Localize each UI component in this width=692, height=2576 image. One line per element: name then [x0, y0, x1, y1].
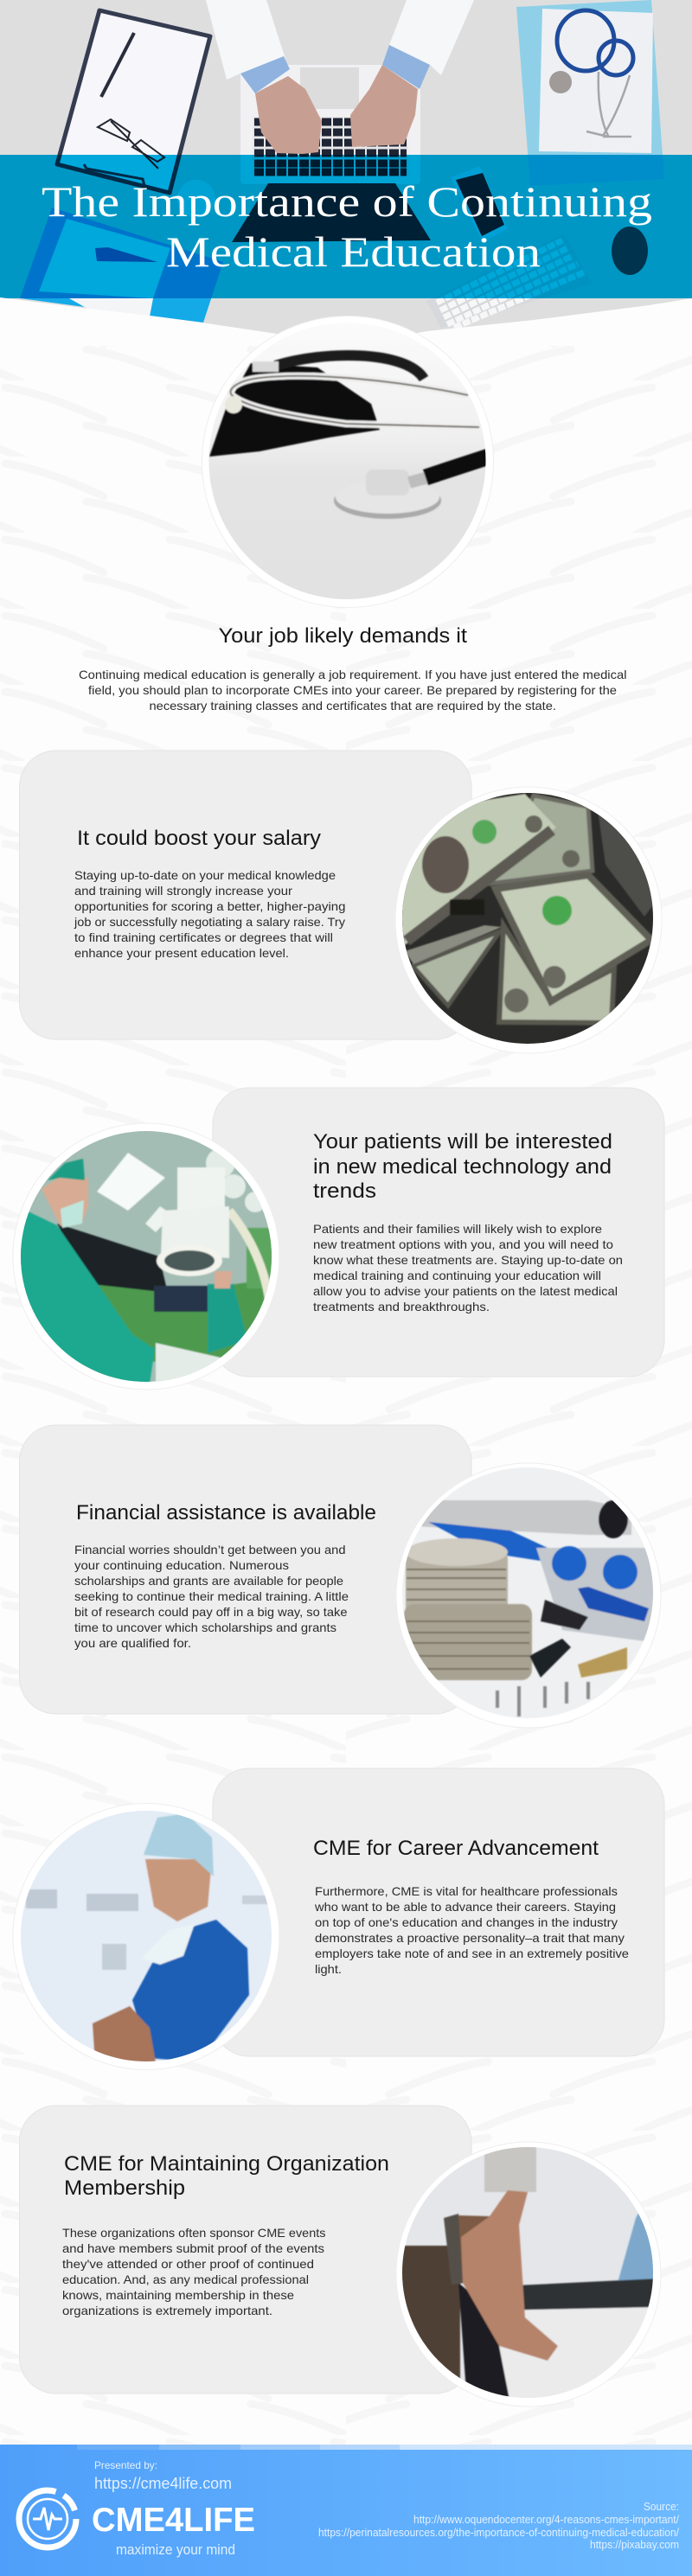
body text: new treatment options with you, and you will need to — [313, 1237, 613, 1251]
section 1: your job likely demands it — [79, 316, 626, 713]
section 5: CME for career advancement — [13, 1768, 664, 2070]
body text — [62, 2226, 325, 2317]
body text: knows, maintaining membership in these — [62, 2288, 294, 2302]
heading: CME for Career Advancement — [313, 1837, 599, 1860]
body text: know what these treatments are. Staying up-to-date on — [313, 1253, 623, 1267]
heading: Financial assistance is available — [76, 1501, 376, 1525]
footer — [0, 2445, 692, 2576]
panel — [19, 2106, 471, 2394]
panel — [213, 1088, 664, 1377]
heading — [64, 2152, 389, 2200]
photo: coins and pens — [396, 1463, 661, 1728]
heading: Membership — [64, 2176, 185, 2200]
body text: education. And, as any medical professional — [62, 2272, 309, 2286]
body text: allow you to advise your patients on the latest medical — [313, 1284, 618, 1298]
tagline: maximize your mind — [116, 2541, 235, 2558]
body text — [314, 1884, 629, 1976]
sources: https://pixabay.com — [590, 2538, 679, 2551]
heading: CME for Maintaining Organization — [64, 2152, 389, 2176]
heading: Your patients will be interested — [313, 1130, 612, 1154]
header photo: doctor's desk — [0, 0, 692, 337]
body text: job or successfully negotiating a salary raise. Try — [74, 915, 345, 929]
photo: dollar bills — [389, 787, 662, 1053]
title: Medical Education — [166, 227, 541, 276]
body text: scholarships and grants are available for people — [74, 1574, 343, 1588]
sources — [318, 2500, 679, 2551]
photo detail: clipboard — [57, 10, 215, 218]
presented by: Presented by: — [94, 2459, 157, 2471]
presented by: https://cme4life.com — [94, 2475, 232, 2492]
section 3: patients interested in new technology — [13, 1088, 664, 1390]
title band — [0, 155, 692, 298]
body text: demonstrates a proactive personality–a trait that many — [315, 1931, 625, 1945]
body text: Financial worries shouldn’t get between you and — [74, 1543, 346, 1556]
heading — [313, 1130, 612, 1203]
body text: Continuing medical education is generally a job requirement. If you have just entered the medical — [79, 668, 626, 681]
body text: who want to be able to advance their careers. Staying — [314, 1900, 616, 1914]
panel — [213, 1768, 664, 2056]
photo: doctor's open hand — [396, 2142, 661, 2407]
body text: Patients and their families will likely wish to explore — [313, 1222, 602, 1236]
footer stepped strip — [77, 2445, 692, 2450]
body text — [74, 1543, 349, 1650]
body text: organizations is extremely important. — [62, 2304, 272, 2317]
body text: employers take note of and see in an extremely positive — [315, 1946, 629, 1960]
logo wordmark: CME4LIFE — [92, 2502, 255, 2539]
footer background — [0, 2445, 692, 2576]
body text: field, you should plan to incorporate CMEs into your career. Be prepared by registering for the — [88, 683, 617, 697]
body text: Furthermore, CME is vital for healthcare professionals — [315, 1884, 618, 1898]
body text: These organizations often sponsor CME events — [62, 2226, 325, 2240]
body text: and have members submit proof of the events — [62, 2241, 324, 2255]
body text: on top of one's education and changes in the industry — [315, 1915, 618, 1929]
body text: light. — [315, 1962, 342, 1976]
body text: you are qualified for. — [74, 1636, 191, 1650]
body text: to find training certificates or degrees that will — [74, 930, 333, 944]
body text: opportunities for scoring a better, higher-paying — [74, 899, 346, 913]
section 6: CME for maintaining organization membership — [19, 2106, 661, 2407]
heading: Your job likely demands it — [218, 624, 467, 648]
body text: medical training and continuing your education will — [313, 1269, 601, 1282]
section 2: it could boost your salary — [19, 751, 662, 1053]
photo: operating room — [13, 1123, 279, 1390]
section 4: financial assistance — [19, 1425, 661, 1728]
header white curved edge — [0, 297, 692, 346]
photo detail: folder and stethoscope — [516, 0, 664, 186]
body text: time to uncover which scholarships and grants — [74, 1620, 336, 1634]
panel — [19, 1425, 471, 1714]
body text: Staying up-to-date on your medical knowledge — [74, 868, 336, 882]
body text — [313, 1222, 623, 1314]
body text: and training will strongly increase your — [74, 884, 292, 898]
body text: bit of research could pay off in a big way, so take — [74, 1605, 348, 1619]
panel — [19, 751, 471, 1039]
presented by — [94, 2459, 232, 2492]
heading: trends — [313, 1179, 376, 1203]
body text — [74, 868, 345, 960]
photo: doctor in blue scrubs — [13, 1804, 279, 2070]
body text: seeking to continue their medical training. A little — [74, 1589, 349, 1603]
icon: CME4LIFE logo — [19, 2490, 76, 2547]
body text: enhance your present education level. — [74, 946, 289, 960]
body text: necessary training classes and certificates that are required by the state. — [149, 699, 556, 713]
title: The Importance of Continuing — [42, 177, 652, 226]
title — [42, 177, 652, 276]
heading: It could boost your salary — [77, 827, 321, 850]
body text — [79, 668, 626, 713]
sources: http://www.oquendocenter.org/4-reasons-cmes-important/ — [413, 2513, 679, 2526]
heading: in new medical technology and — [313, 1155, 612, 1179]
sources: Source: — [644, 2500, 679, 2513]
body text: treatments and breakthroughs. — [313, 1300, 490, 1314]
body text: your continuing education. Numerous — [74, 1558, 289, 1572]
photo detail: phone, keyboard, notebook, thermometer, cup — [20, 166, 648, 329]
body text: they've attended or other proof of continued — [62, 2257, 314, 2271]
photo detail: laptop, doctor's arms and hands — [206, 0, 474, 242]
photo: stethoscope and cuff — [202, 316, 493, 607]
